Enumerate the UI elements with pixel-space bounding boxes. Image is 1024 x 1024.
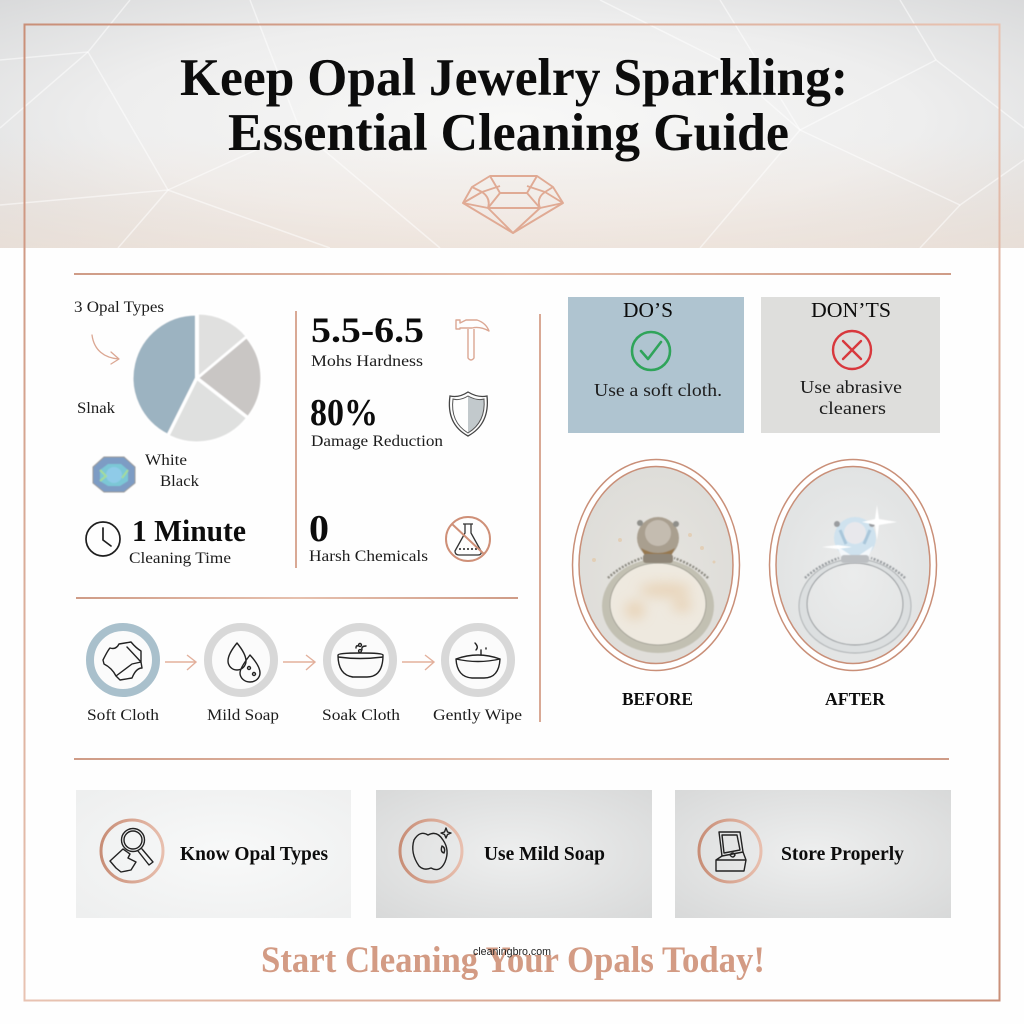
process steps: [87, 627, 522, 724]
title: Keep Opal Jewelry Sparkling:: [180, 49, 848, 107]
icon: jewelry box: [699, 820, 761, 882]
icon: clock: [86, 522, 120, 556]
step: soak cloth: [322, 627, 400, 724]
value: 1 minute: 1 Minute: [132, 513, 246, 548]
text: Use a soft cloth.: [594, 380, 722, 400]
label: white: White: [145, 452, 187, 469]
title: [180, 49, 848, 162]
text: Use Mild Soap: [484, 843, 605, 865]
label: before: BEFORE: [622, 689, 693, 709]
heading: DON’TS: [811, 298, 891, 322]
vertical divider: stats: [295, 311, 297, 568]
icon: opal gem: [93, 457, 135, 492]
vertical divider: right column: [539, 314, 541, 722]
icon: shield: [449, 392, 487, 436]
icon: cross: [833, 331, 871, 369]
stat: cleaning time: [86, 513, 246, 567]
icon: diamond: [463, 176, 563, 233]
icon: hammer: [456, 320, 489, 360]
arrow: [165, 655, 196, 670]
photo: before ring: [572, 460, 740, 670]
step: soft cloth: [87, 627, 159, 724]
pie chart: [132, 314, 261, 442]
value: 80%: [310, 392, 378, 434]
caption: Damage Reduction: [311, 433, 443, 450]
step: soft cloth: Soft Cloth: [87, 707, 159, 724]
step: mild soap: Mild Soap: [207, 707, 279, 724]
card: store properly: [675, 790, 951, 918]
icon: check: [632, 332, 670, 370]
step: mild soap: [207, 627, 279, 724]
call to action: Start Cleaning Your Opals Today!: [261, 940, 765, 981]
arrow: [283, 655, 315, 670]
arrow: curved to pie: [92, 335, 119, 364]
text: Know Opal Types: [180, 843, 328, 865]
title: Essential Cleaning Guide: [228, 104, 789, 162]
panel: don'ts: [761, 297, 940, 433]
step: gently wipe: Gently Wipe: [433, 707, 522, 724]
label: slice name: Slnak: [77, 400, 115, 417]
panel: opal types: [74, 299, 261, 492]
icon: soap: [400, 820, 462, 882]
header banner: [0, 0, 1024, 248]
panel: do's: [568, 297, 744, 433]
value: 5.5-6.5: [311, 310, 424, 350]
caption: Harsh Chemicals: [309, 548, 428, 565]
value: 0: [309, 508, 329, 550]
caption: Cleaning Time: [129, 550, 231, 567]
step: soak cloth: Soak Cloth: [322, 707, 400, 724]
watermark: cleaningbro.com: [473, 946, 551, 958]
stat: hardness: [311, 310, 489, 370]
caption: Mohs Hardness: [311, 353, 423, 370]
panel: don'ts: cleaners: [819, 398, 886, 418]
photo: after ring: [770, 460, 936, 670]
stat: damage reduction: [310, 392, 487, 450]
label: 3 opal types: 3 Opal Types: [74, 299, 164, 316]
arrow: [402, 655, 434, 670]
card: use mild soap: [376, 790, 652, 918]
card: know opal types: [76, 790, 351, 918]
heading: DO’S: [623, 298, 673, 322]
icon: magnifier and hand: [101, 820, 163, 882]
text: Use abrasive: [800, 377, 902, 397]
icon: no chemicals flask: [446, 517, 490, 561]
label: black: Black: [160, 473, 199, 490]
label: after: AFTER: [825, 689, 885, 709]
stat: harsh chemicals: [309, 508, 490, 565]
step: gently wipe: [433, 627, 522, 724]
icon: sparkle: [822, 505, 897, 549]
text: Store Properly: [781, 843, 904, 865]
